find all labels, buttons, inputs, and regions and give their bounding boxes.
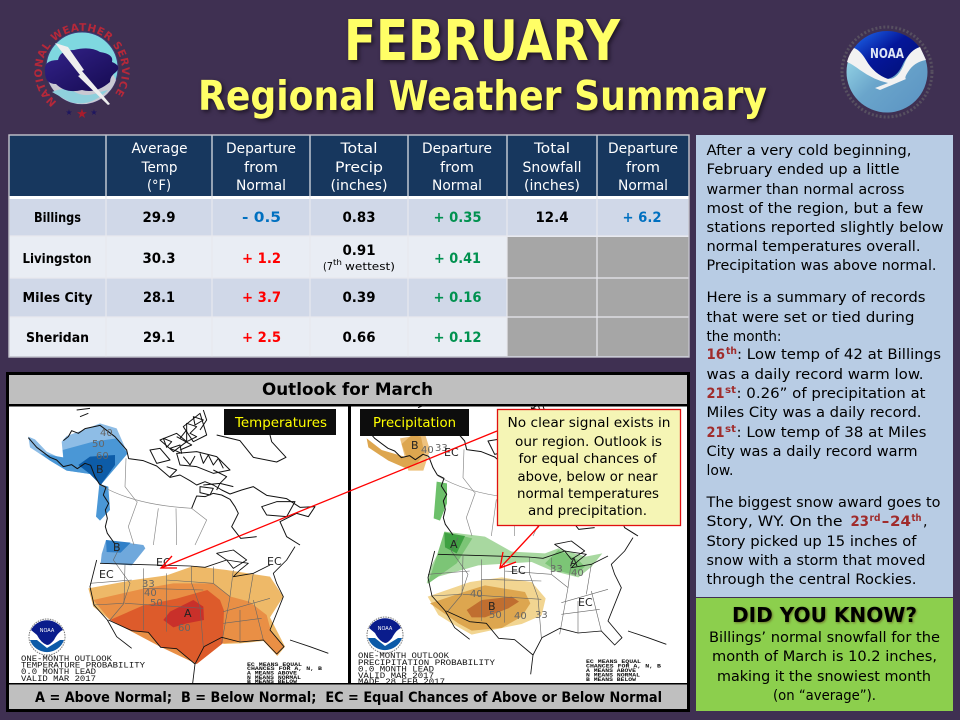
map labels: temperature probabilities: 60 [178, 623, 191, 634]
map caption: temperature probability: CHANCES FOR A, N, B [247, 665, 323, 672]
map labels: precipitation probabilities: A [450, 538, 458, 551]
text: biggest snow award: th [912, 513, 922, 524]
map caption: temperature probability: ONE-MONTH OUTLOOK [21, 655, 112, 664]
text: records: Miles City was a daily record. [706, 405, 922, 421]
icon: NOAA mark [29, 619, 65, 655]
row: Billings: + 0.35 [434, 210, 482, 226]
map caption: precipitation probability: A MEANS ABOVE [586, 667, 637, 674]
map labels: temperature probabilities: 33 [142, 579, 155, 590]
map labels: temperature probabilities: 50 [92, 439, 105, 450]
map labels: precipitation probabilities: 33 [550, 564, 563, 575]
map labels: precipitation probabilities: 50 [489, 610, 502, 621]
text: biggest snow award: Story picked up 15 inches of [706, 534, 918, 550]
row: Livingston: + 1.2 [242, 251, 281, 267]
callout: and precipitation. [528, 503, 647, 519]
text: month overview: stations reported slightly below [706, 220, 944, 236]
map caption: precipitation probability: B MEANS BELOW [586, 676, 637, 683]
label: Precipitation [360, 409, 469, 436]
row: Billings: 29.9 [142, 210, 176, 226]
logo: NOAA: NOAA [870, 47, 904, 62]
callout: our region. Outlook is [515, 434, 662, 450]
table header row: from [244, 160, 278, 176]
map labels: temperature probabilities: 60 [96, 451, 109, 462]
table header row: Precip [335, 160, 383, 176]
map labels: temperature probabilities: 40 [144, 588, 157, 599]
map caption: temperature probability: B MEANS BELOW [247, 678, 298, 685]
map labels: precipitation probabilities: 33 [535, 610, 548, 621]
map caption: temperature probability [21, 655, 323, 685]
map labels: precipitation probabilities: EC [511, 564, 526, 577]
logo: National Weather Service: ★ [76, 107, 88, 122]
label: Precipitation: Precipitation [373, 415, 456, 431]
map caption: precipitation probability: PRECIPITATION PROBABILITY [358, 659, 495, 668]
map caption: temperature probability: EC MEANS EQUAL [247, 661, 303, 668]
map labels: precipitation probabilities: 40 [470, 589, 483, 600]
text: biggest snow award: through the central Rockies. [706, 572, 916, 588]
callout: above, below or near [518, 469, 658, 485]
logo: National Weather Service: NATIONAL WEATHER SERVICE [34, 23, 130, 107]
table header row: from [626, 160, 660, 176]
row: Billings: + 6.2 [622, 210, 662, 226]
map caption: temperature probability: 0.0 MONTH LEAD [21, 668, 96, 677]
row: Sheridan [26, 330, 482, 346]
map caption: temperature probability: VALID MAR 2017 [21, 675, 96, 684]
map caption: precipitation probability [358, 652, 661, 683]
row: Livingston: 0.91 [342, 243, 376, 259]
row: Livingston: Livingston [22, 252, 92, 267]
table header row: Snowfall [522, 160, 582, 176]
legend bar [9, 683, 687, 709]
row: Miles City [22, 290, 482, 306]
map labels: temperature probabilities: EC [156, 556, 171, 569]
callout [498, 410, 680, 526]
title: Regional Weather Summary [198, 72, 767, 120]
map caption: precipitation probability: 0.0 MONTH LEAD [358, 666, 434, 674]
logo: NOAA [842, 27, 932, 117]
text: records: 16 [706, 347, 725, 363]
did you know text: month of March is 10.2 inches, [712, 649, 937, 665]
map caption: precipitation probability: ONE-MONTH OUTLOOK [358, 652, 449, 661]
text: biggest snow award: The biggest snow award goes to [705, 495, 940, 511]
panel: did you know [696, 598, 953, 711]
row: Livingston: (7 [323, 260, 333, 273]
row: Sheridan: + 2.5 [242, 330, 281, 346]
row: Sheridan: + 0.12 [434, 330, 482, 346]
panel: monthly data table [9, 135, 689, 357]
text: biggest snow award: Story, WY. On the [706, 514, 842, 530]
map labels: temperature probabilities [92, 428, 282, 634]
row: Miles City: + 0.16 [434, 290, 482, 306]
row: Miles City: Miles City [22, 291, 93, 306]
map caption: temperature probability: TEMPERATURE PROBABILITY [21, 662, 145, 670]
text: records: : Low temp of 42 at Billings [737, 347, 941, 363]
row: Miles City: 28.1 [143, 290, 175, 306]
callout: for equal chances of [518, 451, 658, 467]
did you know text: making it the snowiest month [717, 669, 931, 685]
text: month overview: After a very cold beginning, [706, 143, 912, 159]
text: records: th [726, 346, 737, 357]
icon: NOAA mark: NOAA [378, 626, 393, 632]
row: Miles City: 0.39 [342, 290, 376, 306]
outlook heading [9, 375, 687, 406]
did you know text: Billings’ normal snowfall for the [709, 630, 940, 646]
table header row: Departure [422, 141, 492, 157]
label: Temperatures [224, 409, 336, 435]
panel: narrative summary [696, 135, 953, 597]
row: Miles City: + 3.7 [242, 290, 281, 306]
title: FEBRUARY [344, 9, 621, 74]
table header row: Total [339, 141, 378, 157]
map caption: precipitation probability: VALID MAR 2017 [358, 672, 434, 681]
map labels: precipitation probabilities: 40 [421, 445, 434, 456]
table header row: (inches) [330, 178, 388, 194]
table header row: (°F) [147, 178, 171, 194]
map labels: precipitation probabilities: B [488, 600, 496, 613]
map labels: precipitation probabilities: 40 [514, 611, 527, 622]
map labels: temperature probabilities: B [96, 463, 104, 476]
legend bar: A = Above Normal; B = Below Normal; EC = Equal Chances of Above or Below Normal [35, 690, 662, 706]
text: records: the month: [706, 329, 782, 345]
map caption: temperature probability: A MEANS ABOVE [247, 670, 298, 676]
callout: normal temperatures [517, 486, 659, 502]
label: Temperatures: Temperatures [234, 415, 327, 431]
map labels: precipitation probabilities: EC [444, 446, 459, 459]
text: records: 21 [706, 386, 724, 402]
map caption: precipitation probability: MADE 28 FEB 2017 [358, 678, 445, 687]
arrow: callout to precipitation map [500, 526, 539, 568]
did you know heading: DID YOU KNOW? [732, 603, 917, 627]
table header row: Departure [608, 141, 678, 157]
text: records: City was a daily record warm [706, 444, 918, 460]
text: records: 21 [706, 425, 724, 441]
row: Livingston: wettest) [345, 260, 395, 273]
row: Sheridan: 0.66 [342, 330, 376, 346]
table header row: Average [132, 141, 188, 157]
row: Sheridan: Sheridan [26, 331, 89, 346]
row: Billings [34, 210, 662, 226]
text: records: was a daily record warm low. [706, 367, 924, 383]
text: month overview: most of the region, but a few [706, 201, 924, 217]
text: month overview: Precipitation was above normal. [706, 258, 936, 274]
did you know text [709, 630, 940, 704]
text: month overview [706, 143, 944, 274]
table header row: (inches) [524, 178, 580, 194]
title [198, 9, 767, 120]
text: records: st [725, 385, 736, 396]
map labels: precipitation probabilities: 40 [571, 568, 584, 579]
logo: National Weather Service: ★ [90, 108, 98, 117]
map labels: temperature probabilities: EC [99, 568, 114, 581]
text: biggest snow award: rd [870, 513, 880, 524]
icon: NOAA mark [367, 617, 403, 653]
row: Livingston [22, 243, 481, 273]
table header row: Normal [432, 178, 482, 194]
logo: National Weather Service: ★ [65, 108, 73, 117]
did you know text: (on “average”). [773, 688, 876, 704]
table header row: Normal [618, 178, 668, 194]
text: biggest snow award: snow with a storm that moved [706, 553, 926, 569]
map labels: precipitation probabilities [411, 439, 593, 622]
map labels: precipitation probabilities: B [411, 439, 419, 452]
map labels: precipitation probabilities: A [570, 556, 578, 569]
text: biggest snow award [705, 495, 940, 588]
map labels: temperature probabilities: B [113, 541, 121, 554]
table header row: Normal [236, 178, 286, 194]
text: biggest snow award: - [882, 514, 890, 530]
arrow: callout to temperature map [161, 431, 497, 568]
map divider [348, 405, 351, 684]
map labels: precipitation probabilities: 33 [435, 443, 448, 454]
row: Billings: 0.83 [342, 210, 376, 226]
icon: NOAA mark: NOAA [40, 628, 55, 634]
panel: outlook for March [8, 374, 688, 710]
table header row: Temp [141, 160, 178, 176]
callout: No clear signal exists in [508, 415, 670, 431]
text: records: st [725, 424, 736, 435]
text: month overview: warmer than normal across [706, 182, 904, 198]
map caption: temperature probability: N MEANS NORMAL [247, 674, 302, 681]
row: Livingston: 30.3 [142, 251, 176, 267]
row: Livingston: th [333, 258, 342, 267]
table header row: Departure [226, 141, 296, 157]
map caption: precipitation probability: N MEANS NORMAL [586, 672, 641, 678]
text: records [706, 290, 941, 479]
text: biggest snow award: 24 [890, 514, 911, 530]
row: Billings: - 0.5 [242, 210, 281, 226]
map caption: precipitation probability: CHANCES FOR A, N, B [586, 662, 662, 670]
map: temperature outlook [21, 408, 328, 685]
text: records: Here is a summary of records [706, 290, 926, 306]
table header row: from [440, 160, 474, 176]
map labels: temperature probabilities: EC [267, 555, 282, 568]
map labels: temperature probabilities: 40 [100, 428, 113, 439]
row: Billings: 12.4 [536, 210, 569, 226]
text: biggest snow award: 23 [850, 514, 869, 530]
map labels: temperature probabilities: A [184, 607, 192, 620]
text: month overview: February ended up a little [706, 162, 900, 178]
map caption: precipitation probability: EC MEANS EQUAL [586, 658, 642, 665]
text: month overview: normal temperatures overall. [706, 239, 920, 255]
text: records: : Low temp of 38 at Miles [736, 425, 926, 441]
row: Billings: Billings [34, 211, 81, 226]
map labels: temperature probabilities: 50 [150, 598, 163, 609]
text: records: : 0.26” of precipitation at [736, 386, 926, 402]
text: records: low. [706, 463, 734, 479]
row: Sheridan: 29.1 [143, 330, 175, 346]
map labels: precipitation probabilities: EC [578, 596, 593, 609]
text: records: that were set or tied during [706, 310, 914, 326]
map: precipitation outlook [358, 399, 666, 687]
table header row: Total [533, 141, 570, 157]
text: biggest snow award: , [923, 514, 927, 530]
row: Livingston: + 0.41 [434, 251, 481, 267]
outlook heading: Outlook for March [262, 380, 433, 400]
table header row [132, 141, 678, 194]
